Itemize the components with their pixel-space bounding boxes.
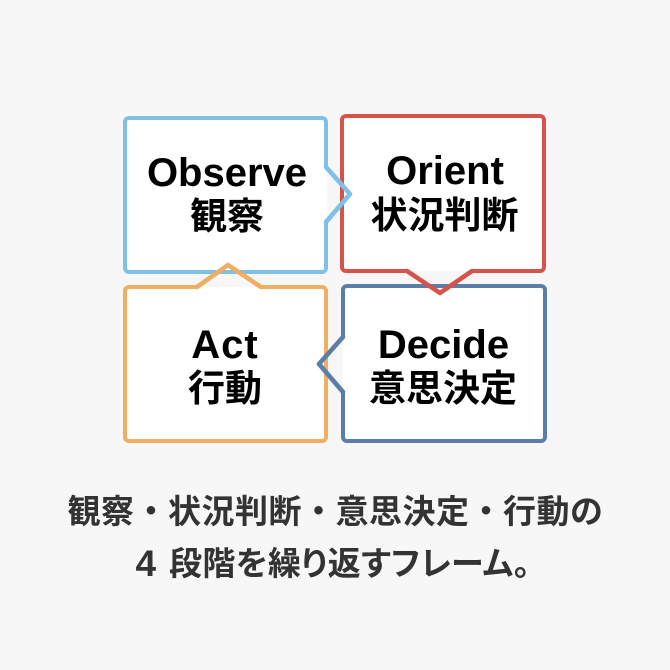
panel: Act: Act [191, 323, 259, 367]
caption: 観察・状況判断・意思決定・行動の [68, 493, 604, 530]
panel: Observe [125, 118, 326, 272]
caption: 4 [136, 543, 156, 584]
panel: Orient: Orient [386, 149, 504, 193]
panel: Observe: 観察 [190, 196, 264, 237]
panel: Orient [342, 116, 544, 271]
caption: 段階を繰り返すフレーム。 [169, 545, 530, 582]
panel: Act [125, 287, 326, 441]
box fills [125, 116, 545, 441]
panel: Decide: 意思決定 [369, 368, 517, 409]
panel: Decide: Decide [378, 323, 509, 367]
panel: Decide [343, 286, 545, 441]
panel: Orient: 状況判断 [370, 195, 518, 236]
panel: Act: 行動 [188, 368, 262, 409]
arrow: Orient to Decide [407, 271, 472, 293]
arrow: Decide to Act [319, 337, 343, 392]
caption [68, 493, 604, 584]
panel: Observe: Observe [147, 151, 307, 195]
arrow: Observe to Orient [326, 167, 350, 222]
arrow: Act to Observe [197, 265, 261, 287]
